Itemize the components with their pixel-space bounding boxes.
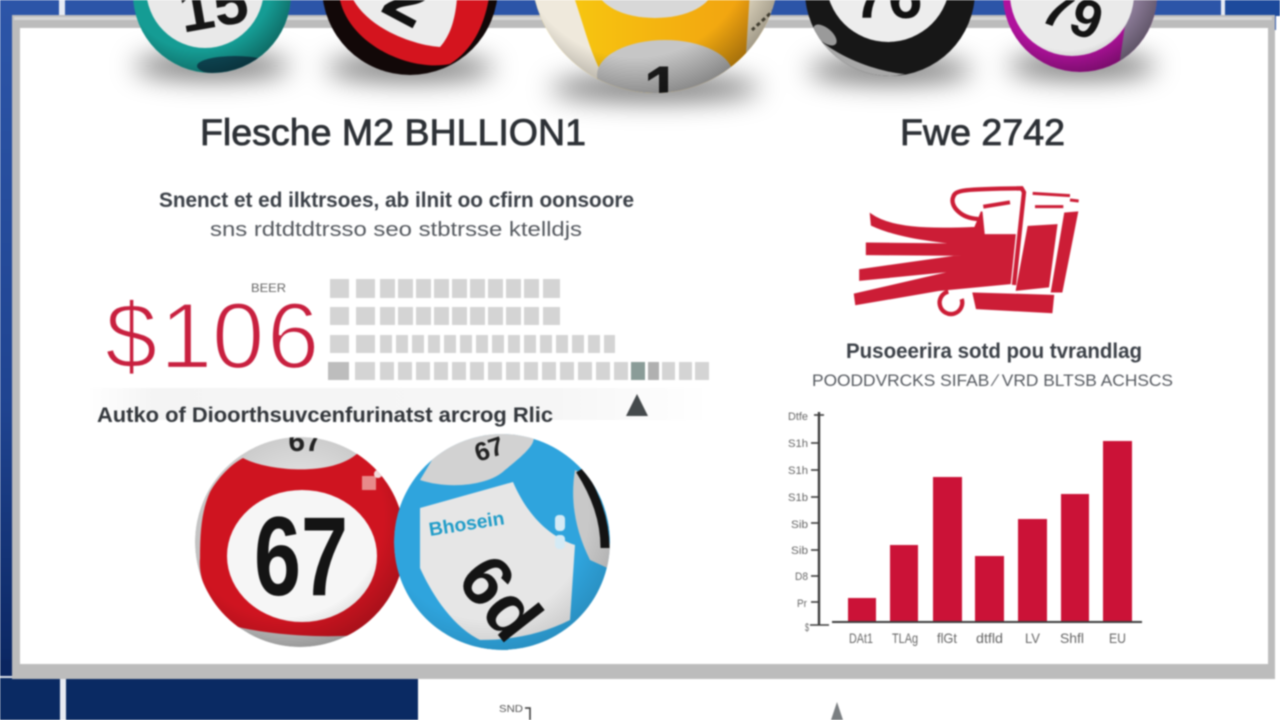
- ball: purple 79: [1002, 0, 1158, 73]
- ball: yellow 1: 1: [644, 52, 680, 126]
- ball: blue 6d: 6d: [442, 541, 557, 656]
- heading: right: Fwe 2742: [900, 112, 1065, 153]
- x axis labels: [849, 630, 1126, 646]
- y axis labels: S1b: [788, 492, 808, 504]
- x axis labels: Shfl: [1060, 630, 1084, 646]
- y axis labels: Sib: [791, 519, 808, 531]
- ball: yellow 1: [534, 0, 776, 94]
- caption band with marker: [90, 388, 715, 427]
- blurred data rows: [328, 279, 709, 380]
- intro text: [159, 189, 634, 241]
- right panel caption: [812, 340, 1173, 390]
- y axis labels: D8: [795, 571, 808, 583]
- baseline: [832, 621, 1142, 623]
- y axis labels: S1h: [788, 438, 808, 450]
- cropped lower chart fragment: [499, 702, 843, 720]
- right panel caption: POODDVRCKS SIFAB ∕ VRD BLTSB ACHSCS: [812, 371, 1173, 390]
- ball: red 67: 67: [288, 425, 322, 458]
- right panel caption: Pusoeerira sotd pou tvrandlag: [846, 340, 1142, 363]
- caption: Autko of Dioorthsuvcenfurinatst arcrog Rlic: [97, 404, 553, 427]
- x axis labels: dtfld: [976, 630, 1003, 646]
- x axis labels: TLAg: [892, 630, 918, 646]
- marker triangle: [626, 394, 648, 416]
- label on ball: Bhosein: [427, 508, 506, 541]
- big figure: $106: BEER: [251, 281, 286, 295]
- intro text: sns rdtdtdtrsso seo stbtrsse ktelldjs: [210, 219, 582, 241]
- y axis labels: Dtfe: [788, 411, 808, 423]
- x axis labels: DAt1: [849, 630, 873, 646]
- y axis labels: $: [805, 622, 809, 634]
- y axis labels: Pr: [797, 598, 807, 610]
- y axis labels: S1h: [788, 465, 808, 477]
- bar chart: [788, 411, 1142, 646]
- y axis labels: [788, 411, 809, 634]
- cropped lower chart fragment: SND: [499, 704, 523, 715]
- icon: red speeding truck: [855, 188, 1079, 314]
- ball row along top edge: [132, 0, 1158, 94]
- ball shadows: [134, 53, 1156, 101]
- ball: teal 15: [132, 0, 292, 74]
- ball: black 76: [804, 0, 976, 76]
- ball: blue 6d: [394, 430, 612, 656]
- heading: left: Flesche M2 BHLLION1: [200, 112, 586, 153]
- big figure: $106: $106: [105, 283, 319, 388]
- ball: red 2: [320, 0, 500, 80]
- x axis labels: LV: [1025, 630, 1041, 646]
- bars: [848, 441, 1132, 622]
- x axis labels: flGt: [937, 630, 957, 646]
- y axis with ticks: [810, 412, 829, 625]
- x axis labels: EU: [1109, 630, 1126, 646]
- ball: blue 6d: 67: [471, 430, 507, 468]
- intro text: Snenct et ed ilktrsoes, ab ilnit oo cfirn oonsoore: [159, 189, 634, 212]
- marker triangle: [831, 702, 843, 720]
- ball: red 67: 67: [254, 494, 348, 619]
- ball: red 67: [195, 425, 408, 647]
- y axis labels: Sib: [791, 545, 808, 557]
